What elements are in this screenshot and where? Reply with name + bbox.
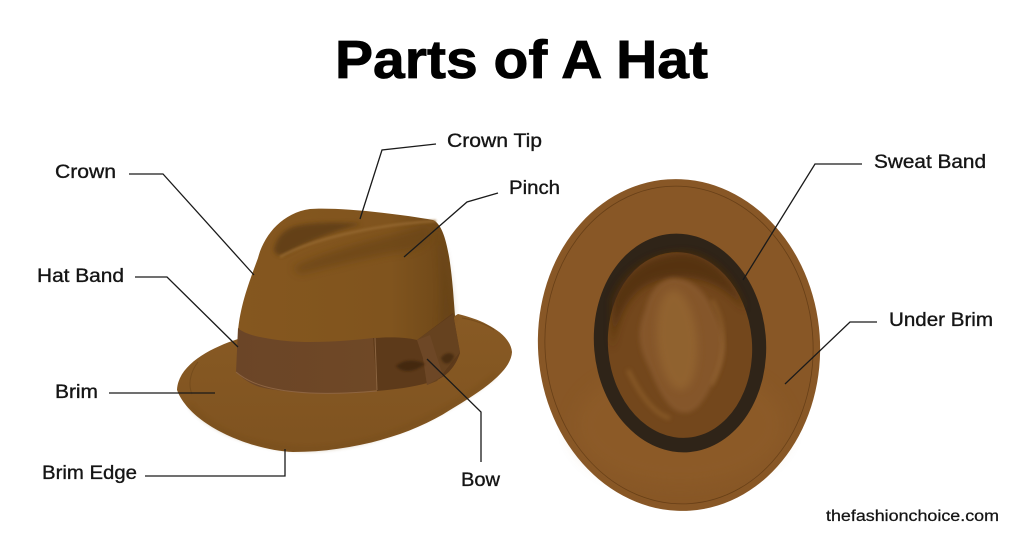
crown (238, 209, 455, 345)
under brim (527, 170, 831, 520)
bow (373, 313, 460, 391)
website credit: thefashionchoice.com (826, 508, 999, 525)
crown pinch shading (274, 223, 362, 255)
illustration: side view of fedora (177, 209, 512, 452)
label: Bow: Bow (461, 470, 500, 491)
label: Crown Tip: Crown Tip (447, 131, 542, 152)
leader lines (109, 144, 877, 476)
crown interior (600, 246, 760, 444)
label: Hat Band: Hat Band (37, 266, 124, 287)
label: Sweat Band: Sweat Band (874, 152, 986, 173)
label: Under Brim: Under Brim (889, 310, 993, 331)
illustration: underside view of fedora (527, 170, 831, 520)
sweat band (585, 226, 775, 460)
crown dent (640, 278, 724, 413)
hat band (236, 328, 377, 393)
label: Crown: Crown (55, 162, 116, 183)
label: Brim Edge: Brim Edge (42, 463, 137, 484)
brim stitched ridge (190, 362, 198, 394)
brim (177, 314, 512, 452)
label: Pinch: Pinch (509, 178, 560, 199)
label: Brim: Brim (55, 382, 98, 403)
title: Parts of A Hat (335, 30, 708, 90)
